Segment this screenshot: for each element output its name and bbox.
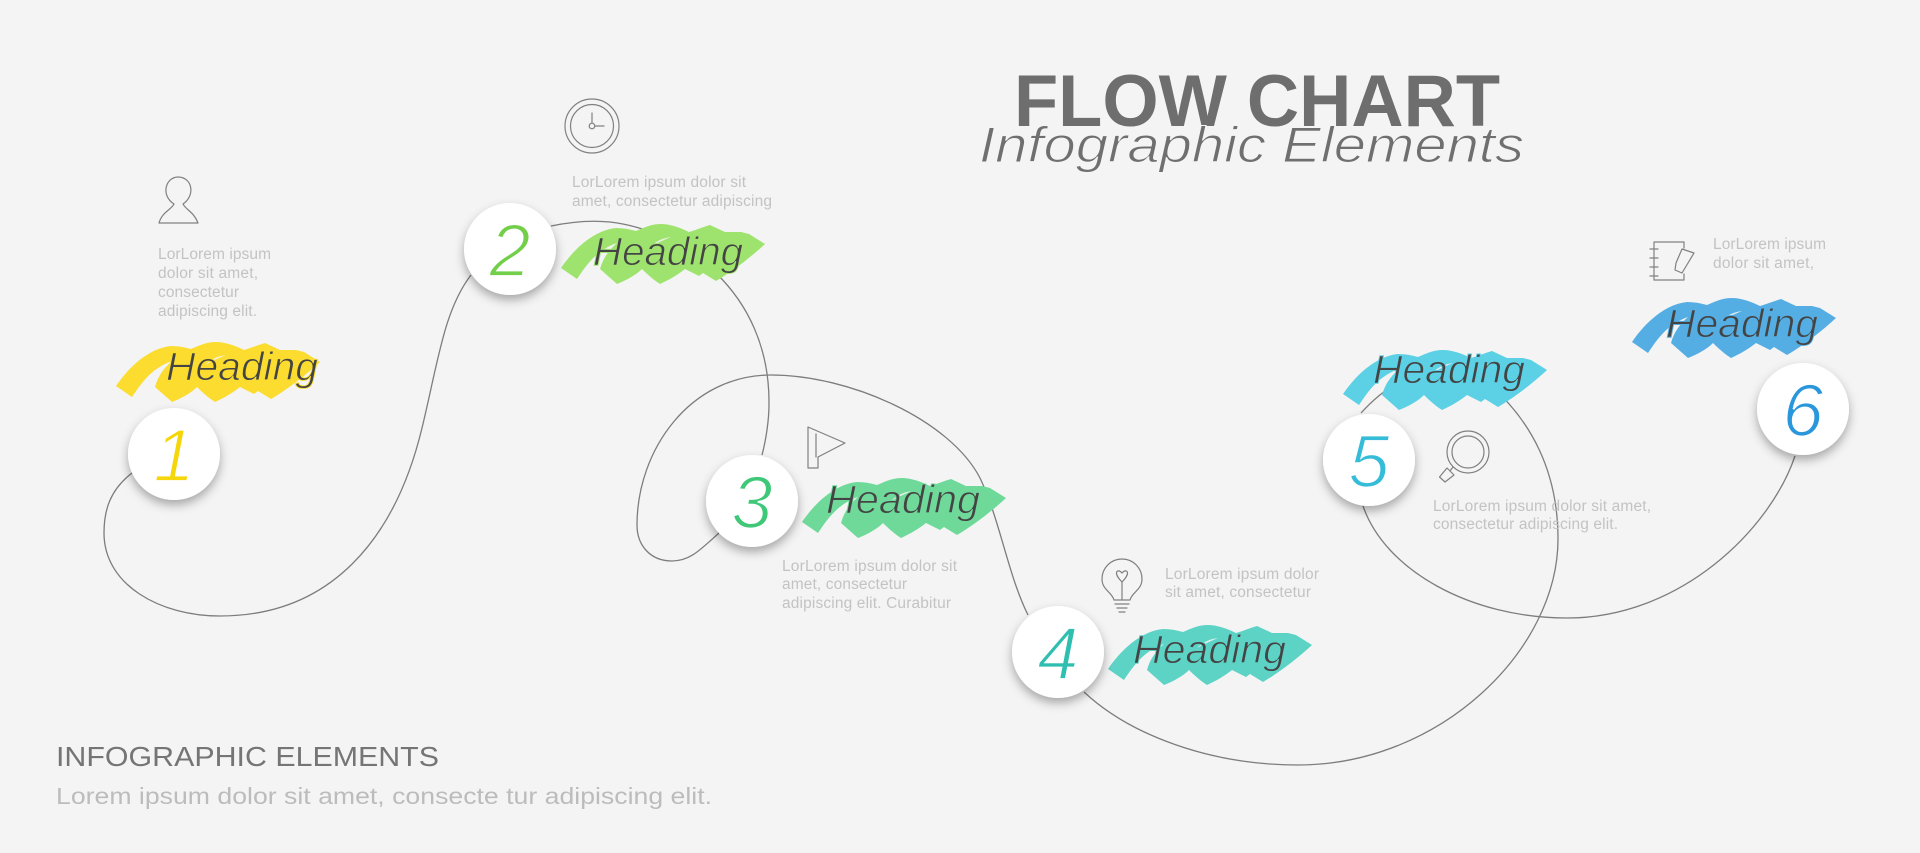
number circle 6 (1757, 363, 1849, 455)
icon: notebook and pencil (1650, 242, 1694, 280)
number circle 1 (128, 408, 220, 500)
icon: magnifier (1440, 431, 1489, 482)
heading: step 2: Heading (593, 230, 743, 274)
text: step 1: consectetur (158, 284, 239, 301)
text: step 2: amet, consectetur adipiscing (572, 193, 772, 210)
number circle 3 (706, 455, 798, 547)
number circle 2 (464, 203, 556, 295)
heading: step 5: Heading (1373, 348, 1525, 392)
icon: person (159, 177, 198, 223)
text: step 6 (1713, 236, 1826, 272)
icon: light bulb (1102, 559, 1142, 612)
number circle 3: 3 (731, 461, 773, 544)
text: step 5: LorLorem ipsum dolor sit amet, (1433, 498, 1651, 515)
step 4 (1012, 559, 1319, 698)
number circle 4 (1012, 606, 1104, 698)
text: step 1: adipiscing elit. (158, 303, 257, 320)
number circle 4: 4 (1037, 612, 1079, 695)
text: step 1 (158, 246, 271, 320)
heading: step 1: Heading (166, 345, 318, 389)
title: FLOW CHART (1014, 61, 1500, 142)
footer text: Lorem ipsum dolor sit amet, consecte tur adipiscing elit. (56, 783, 712, 809)
text: step 3: amet, consectetur (782, 576, 907, 593)
step 1 (116, 177, 320, 500)
text: step 5 (1433, 498, 1651, 533)
brush: blue (1632, 298, 1836, 358)
text: step 1: LorLorem ipsum (158, 246, 271, 263)
brush: green (802, 478, 1006, 538)
brush: light green (561, 224, 765, 284)
text: step 4 (1165, 566, 1319, 601)
flow line (104, 221, 1795, 765)
text: step 2: LorLorem ipsum dolor sit (572, 174, 747, 191)
text: step 3: LorLorem ipsum dolor sit (782, 558, 958, 575)
icon: flag (808, 427, 845, 468)
number circle 2: 2 (488, 209, 531, 292)
text: step 6: dolor sit amet, (1713, 255, 1814, 272)
text: step 4: sit amet, consectetur (1165, 584, 1311, 601)
brush: cyan (1343, 350, 1547, 410)
text: step 1: dolor sit amet, (158, 265, 258, 282)
subtitle: Infographic Elements (979, 117, 1524, 173)
text: step 4: LorLorem ipsum dolor (1165, 566, 1319, 583)
text: step 3 (782, 558, 958, 612)
step 3 (706, 427, 1006, 612)
step 6 (1632, 236, 1849, 455)
number circle 5 (1323, 414, 1415, 506)
number circle 1: 1 (153, 414, 195, 497)
step 5 (1323, 348, 1651, 533)
footer heading: INFOGRAPHIC ELEMENTS (56, 741, 439, 772)
text: step 2 (572, 174, 772, 210)
step 2 (464, 99, 772, 295)
text: step 5: consectetur adipiscing elit. (1433, 516, 1618, 533)
heading: step 6: Heading (1666, 302, 1818, 346)
brush: teal (1108, 625, 1312, 685)
text: step 6: LorLorem ipsum (1713, 236, 1826, 253)
text: step 3: adipiscing elit. Curabitur (782, 595, 951, 612)
heading: step 4: Heading (1133, 628, 1286, 672)
icon: clock (565, 99, 619, 153)
number circle 6: 6 (1782, 369, 1824, 452)
heading: step 3: Heading (826, 478, 980, 522)
number circle 5: 5 (1348, 420, 1390, 503)
brush: yellow (116, 342, 320, 402)
